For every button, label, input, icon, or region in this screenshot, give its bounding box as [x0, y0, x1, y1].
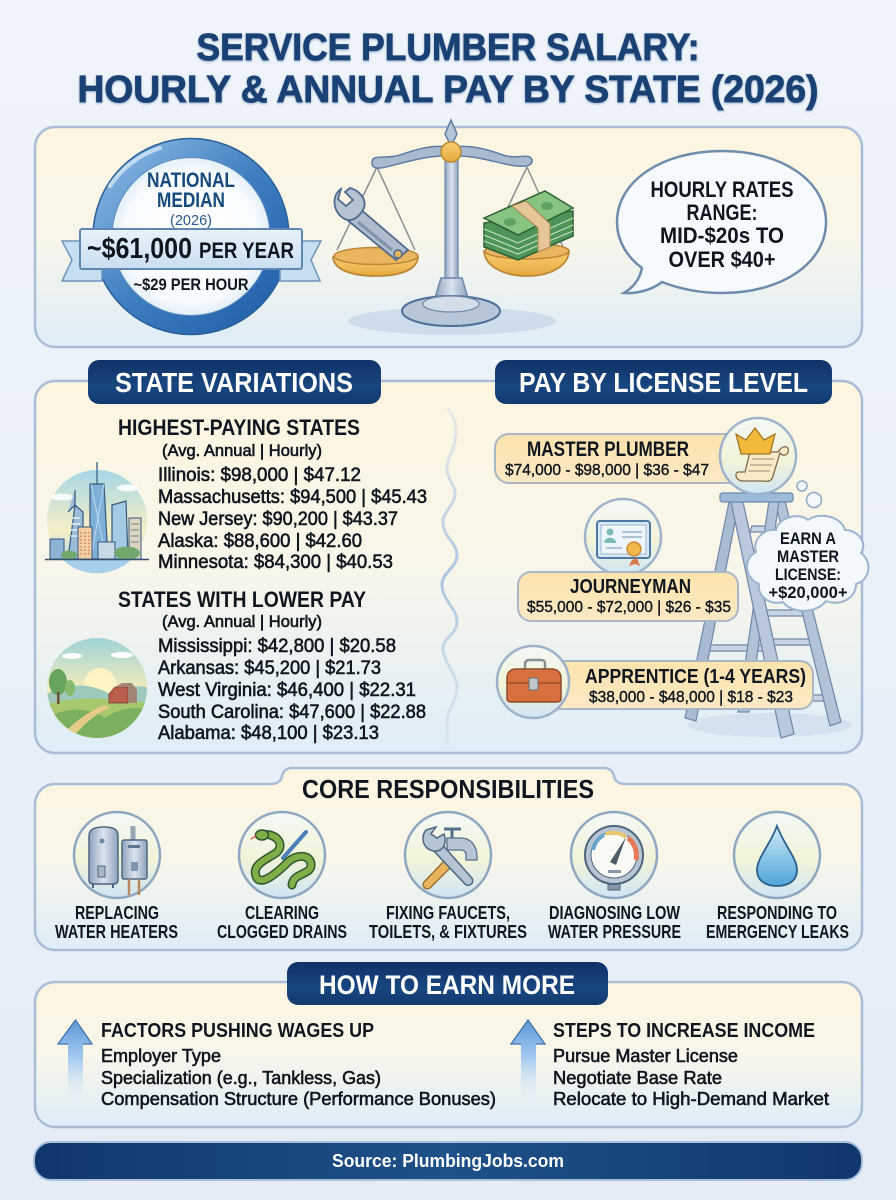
license: master plumber: $74,000 - $98,000 | $36 - $47: [505, 462, 709, 479]
icon: water drop: [757, 826, 797, 886]
title: [78, 27, 818, 111]
icon: crown and scroll: [720, 418, 796, 494]
badge: national median: PER YEAR: [199, 238, 294, 263]
text: factors pushing wages up: Employer Type: [101, 1045, 221, 1066]
text: factors pushing wages up: Compensation Structure (Performance Bonuses): [101, 1088, 496, 1109]
badge: national median: MEDIAN: [157, 189, 225, 212]
footer: source: Source: PlumbingJobs.com: [332, 1151, 564, 1171]
heading: pay by license level: [495, 360, 832, 404]
callout: earn a master license: [747, 481, 868, 611]
text: steps to increase income: [553, 1019, 829, 1109]
license: apprentice: [497, 646, 813, 718]
icon: wrench on pan: [333, 188, 418, 276]
icon: drain snake: [251, 830, 311, 885]
item: diagnosing low water pressure: [548, 812, 681, 942]
footer: source: [34, 1142, 862, 1180]
item: responding to emergency leaks: RESPONDING TO: [717, 903, 837, 923]
text: factors pushing wages up: [101, 1019, 496, 1109]
icon: wrench and faucet: [423, 827, 477, 889]
text: steps to increase income: Relocate to High-Demand Market: [553, 1088, 829, 1109]
item: clearing clogged drains: CLEARING: [245, 903, 319, 923]
title: SERVICE PLUMBER SALARY:: [196, 27, 700, 69]
callout: earn a master license: LICENSE:: [775, 566, 841, 584]
heading: how to earn more: HOW TO EARN MORE: [319, 970, 575, 1000]
license: master plumber: [495, 418, 796, 494]
heading: pay by license level: PAY BY LICENSE LEVEL: [519, 367, 808, 398]
item: fixing faucets: FIXING FAUCETS,: [386, 903, 510, 923]
badge: national median: (2026): [170, 212, 212, 229]
icon: rural landscape: [45, 638, 150, 740]
list: highest-paying states: Illinois: $98,000 | $47.12: [158, 464, 361, 486]
icon: balance scale: [333, 120, 573, 335]
badge: national median: ~$61,000: [87, 233, 192, 265]
panel: core responsibilities: [35, 768, 862, 950]
icon: city skyline: [45, 462, 149, 573]
callout: earn a master license: +$20,000+: [768, 584, 848, 602]
callout: earn a master license: EARN A: [780, 530, 836, 548]
list: highest-paying states: [118, 415, 427, 573]
license: apprentice: $38,000 - $48,000 | $18 - $23: [589, 689, 793, 706]
heading: state variations: [88, 360, 381, 404]
badge: national median: ~$29 PER HOUR: [134, 276, 249, 294]
list: states with lower pay: Mississippi: $42,800 | $20.58: [158, 635, 396, 657]
panel: state variations and license level: [35, 360, 868, 753]
title: HOURLY & ANNUAL PAY BY STATE (2026): [78, 69, 818, 111]
speech bubble: hourly rates: RANGE:: [686, 200, 758, 225]
list: states with lower pay: Arkansas: $45,200 | $21.73: [158, 657, 381, 679]
license: journeyman: [518, 499, 738, 621]
badge: national median: [62, 138, 321, 334]
list: highest-paying states: Minnesota: $84,300 | $40.53: [158, 551, 393, 573]
list: states with lower pay: South Carolina: $47,600 | $22.88: [158, 701, 426, 723]
list: highest-paying states: New Jersey: $90,200 | $43.37: [158, 508, 398, 530]
item: replacing water heaters: REPLACING: [75, 903, 159, 923]
list: states with lower pay: Alabama: $48,100 | $23.13: [158, 722, 379, 744]
item: clearing clogged drains: [217, 812, 347, 942]
item: fixing faucets: TOILETS, & FIXTURES: [369, 922, 527, 942]
panel: how to earn more: [35, 962, 862, 1127]
list: highest-paying states: Alaska: $88,600 | $42.60: [158, 530, 362, 552]
list: highest-paying states: Massachusetts: $94,500 | $45.43: [158, 486, 427, 508]
speech bubble: hourly rates: HOURLY RATES: [650, 177, 794, 202]
speech bubble: hourly rates: MID-$20s TO: [660, 223, 784, 248]
text: factors pushing wages up: FACTORS PUSHING WAGES UP: [101, 1019, 374, 1042]
text: steps to increase income: STEPS TO INCREASE INCOME: [553, 1019, 815, 1042]
heading: core responsibilities: CORE RESPONSIBILITIES: [302, 774, 594, 804]
heading: how to earn more: [287, 962, 608, 1005]
speech bubble: hourly rates: OVER $40+: [668, 247, 776, 272]
badge: national median: NATIONAL: [147, 169, 235, 192]
list: states with lower pay: STATES WITH LOWER PAY: [118, 587, 366, 612]
list: highest-paying states: HIGHEST-PAYING STATES: [118, 415, 360, 440]
icon: water heaters: [89, 826, 147, 895]
list: states with lower pay: West Virginia: $46,400 | $22.31: [158, 679, 416, 701]
panel: national median and scale: [35, 120, 862, 347]
text: steps to increase income: Pursue Master License: [553, 1045, 738, 1066]
text: steps to increase income: Negotiate Base Rate: [553, 1067, 722, 1088]
icon: ladder: [685, 493, 852, 738]
icon: pressure gauge: [585, 826, 643, 890]
icon: toolbox: [507, 660, 561, 702]
item: replacing water heaters: [55, 812, 178, 942]
icon: money stack on pan: [484, 191, 573, 276]
icon: license card: [597, 521, 650, 566]
list: highest-paying states: (Avg. Annual | Hourly): [162, 442, 322, 460]
speech bubble: hourly rates: [617, 151, 826, 293]
item: fixing faucets: [369, 812, 527, 942]
item: replacing water heaters: WATER HEATERS: [55, 922, 178, 942]
license: master plumber: MASTER PLUMBER: [527, 438, 689, 461]
item: responding to emergency leaks: [706, 812, 849, 942]
item: diagnosing low water pressure: DIAGNOSING LOW: [549, 903, 680, 923]
callout: earn a master license: MASTER: [777, 548, 839, 566]
license: journeyman: $55,000 - $72,000 | $26 - $35: [527, 599, 731, 616]
license: journeyman: JOURNEYMAN: [570, 575, 691, 598]
heading: state variations: STATE VARIATIONS: [115, 367, 353, 398]
license: apprentice: APPRENTICE (1-4 YEARS): [585, 665, 806, 688]
list: states with lower pay: [118, 587, 426, 744]
list: states with lower pay: (Avg. Annual | Hourly): [162, 613, 322, 631]
arrow: income up: [511, 1020, 545, 1106]
text: factors pushing wages up: Specialization (e.g., Tankless, Gas): [101, 1067, 381, 1088]
item: responding to emergency leaks: EMERGENCY LEAKS: [706, 922, 849, 942]
item: diagnosing low water pressure: WATER PRESSURE: [548, 922, 681, 942]
arrow: wages up: [58, 1020, 92, 1106]
item: clearing clogged drains: CLOGGED DRAINS: [217, 922, 347, 942]
